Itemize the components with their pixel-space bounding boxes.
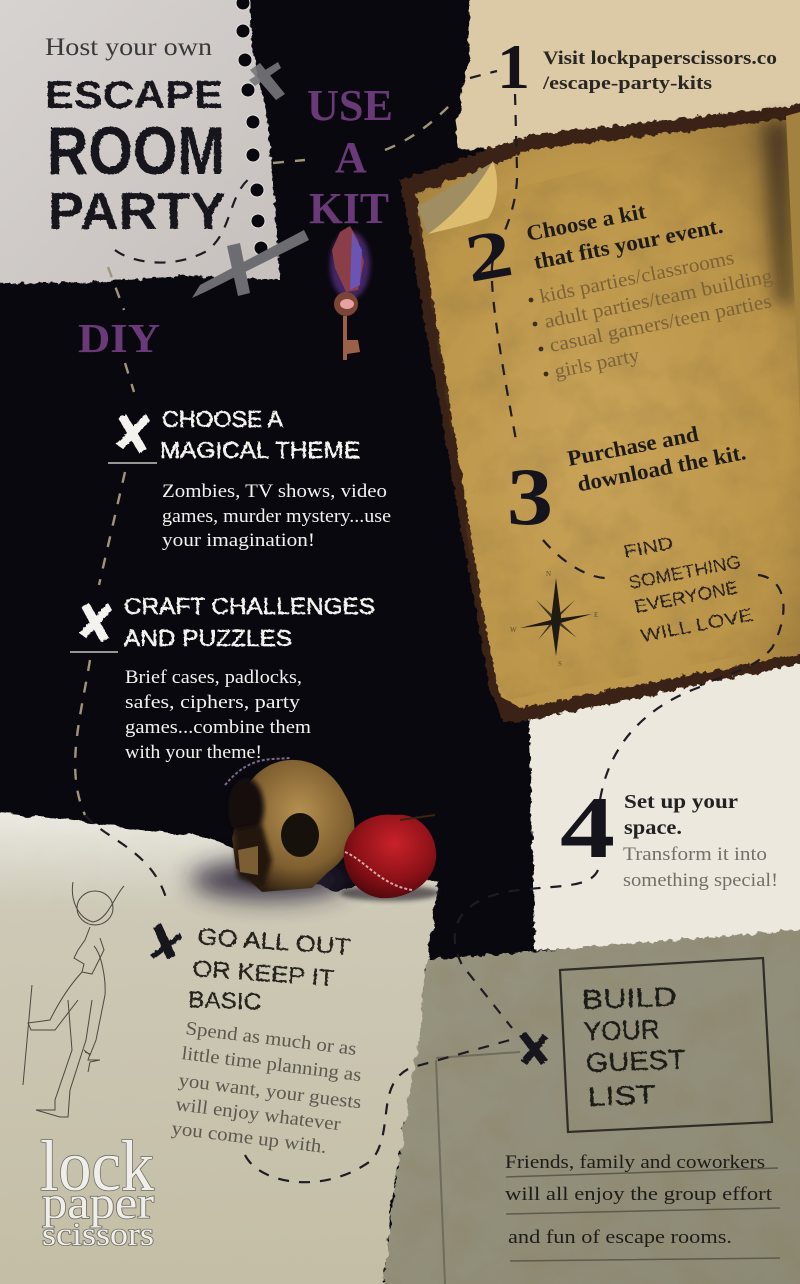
heading: DIY: DIY bbox=[78, 315, 160, 361]
callout: go all out: BASIC bbox=[188, 986, 262, 1015]
panel: envelope lower right bbox=[382, 930, 800, 1284]
title: PARTY bbox=[48, 183, 226, 241]
text: spend as much: little time planning as bbox=[180, 1043, 363, 1086]
text: Host your own: Host your own bbox=[45, 32, 212, 61]
panel: cream paper lower left bbox=[0, 812, 437, 1284]
step 1: /escape-party-kits bbox=[542, 73, 712, 94]
step 1: 1 bbox=[497, 31, 530, 102]
icon: compass rose: N bbox=[546, 570, 551, 578]
step: craft challenges and puzzles: safes, ciphers, party bbox=[125, 692, 301, 713]
panel: beige top-right paper bbox=[455, 0, 800, 150]
callout: find something everyone will love bbox=[622, 533, 755, 646]
heading: use a kit bbox=[307, 81, 393, 233]
callout: find something everyone will love: EVERYONE bbox=[633, 577, 740, 617]
panel: build your guest list box: BUILD bbox=[581, 982, 677, 1015]
panel: build your guest list box: YOUR bbox=[583, 1014, 660, 1047]
logo bbox=[40, 1126, 154, 1253]
icon: compass rose: W bbox=[510, 626, 517, 634]
icon: egyptian figure bbox=[23, 882, 124, 1117]
step 2: casual gamers/teen parties bbox=[548, 290, 774, 357]
text: spend as much: Spend as much or as bbox=[184, 1018, 358, 1060]
step 1: Visit lockpaperscissors.co bbox=[543, 48, 777, 69]
icon: black x bbox=[150, 923, 182, 959]
title: ROOM bbox=[47, 113, 225, 189]
callout: find something everyone will love: FIND bbox=[622, 533, 675, 562]
callout: find something everyone will love: SOMETHING bbox=[627, 552, 743, 593]
step: choose a magical theme: your imagination! bbox=[162, 530, 315, 551]
callout: go all out bbox=[188, 923, 351, 1015]
step: choose a magical theme: Zombies, TV shows, video bbox=[162, 481, 387, 502]
step 4: Transform it into bbox=[623, 844, 767, 865]
icon: folded page corner bbox=[417, 161, 497, 234]
panel: build your guest list box: LIST bbox=[587, 1080, 656, 1112]
callout: go all out: OR KEEP IT bbox=[192, 955, 335, 991]
text: spend as much: you come up with. bbox=[170, 1118, 328, 1158]
step 3 bbox=[507, 413, 748, 542]
icon: skull bbox=[190, 758, 354, 900]
heading: use a kit: KIT bbox=[309, 184, 389, 233]
step: choose a magical theme: games, murder mystery...use bbox=[162, 506, 391, 527]
step 2: adult parties/team building bbox=[543, 265, 774, 333]
step: craft challenges and puzzles: CRAFT CHALLENGES bbox=[124, 593, 375, 619]
callout: find something everyone will love: WILL LOVE bbox=[639, 605, 755, 646]
step: craft challenges and puzzles: games...combine them bbox=[125, 717, 311, 738]
step 1 bbox=[497, 31, 777, 102]
text: friends family: Friends, family and coworkers bbox=[505, 1152, 765, 1173]
step: choose a magical theme: CHOOSE A bbox=[162, 406, 284, 432]
text: friends family: and fun of escape rooms. bbox=[508, 1227, 732, 1248]
title bbox=[45, 74, 226, 241]
heading: use a kit: USE bbox=[307, 81, 393, 130]
icon: compass rose: S bbox=[558, 660, 562, 668]
panel: build your guest list box bbox=[560, 958, 772, 1132]
step: craft challenges and puzzles: AND PUZZLES bbox=[124, 625, 292, 651]
step 4: something special! bbox=[623, 870, 778, 891]
text: spend as much: you want, your guests bbox=[177, 1070, 363, 1113]
icon: tape bottom bbox=[192, 230, 309, 298]
step 2: 2 bbox=[459, 214, 518, 297]
callout: go all out: GO ALL OUT bbox=[197, 923, 351, 960]
heading: use a kit: A bbox=[335, 133, 367, 182]
icon: white x bbox=[116, 414, 150, 453]
step 2: kids parties/classrooms bbox=[538, 247, 736, 308]
logo: lock bbox=[40, 1126, 154, 1206]
panel: white torn paper for step 4 bbox=[528, 650, 800, 950]
step 3: download the kit. bbox=[575, 439, 748, 496]
text: friends family: will all enjoy the group effort bbox=[505, 1184, 773, 1205]
icon: tape top bbox=[249, 62, 285, 100]
icon: compass rose: E bbox=[594, 611, 598, 619]
icon: white x bbox=[79, 603, 112, 642]
text: spend as much bbox=[170, 1018, 363, 1158]
step: craft challenges and puzzles: with your theme! bbox=[125, 742, 262, 763]
panel: old book bbox=[400, 104, 800, 722]
icon: black x by guest list bbox=[519, 1032, 548, 1065]
step: craft challenges and puzzles bbox=[70, 593, 375, 763]
step 3: 3 bbox=[507, 451, 553, 542]
step 2: girls party bbox=[553, 344, 641, 383]
step: craft challenges and puzzles: Brief cases, padlocks, bbox=[125, 667, 302, 688]
step 2: that fits your event. bbox=[532, 213, 725, 274]
icon: key bbox=[330, 226, 370, 360]
step 4: Set up your bbox=[624, 791, 738, 813]
text: friends family bbox=[505, 1152, 780, 1261]
step: choose a magical theme bbox=[108, 406, 391, 551]
logo: scissors bbox=[42, 1217, 154, 1253]
step: choose a magical theme: MAGICAL THEME bbox=[160, 437, 360, 463]
text: spend as much: will enjoy whatever bbox=[174, 1094, 342, 1135]
step 3: Purchase and bbox=[565, 421, 701, 471]
step 2 bbox=[459, 184, 774, 383]
dashed path bbox=[75, 71, 783, 1182]
step 4: space. bbox=[624, 817, 682, 839]
icon: apple bbox=[340, 815, 440, 901]
logo: paper bbox=[42, 1177, 154, 1228]
panel: grey note paper bbox=[0, 0, 280, 284]
panel: build your guest list box: GUEST bbox=[585, 1045, 686, 1078]
title: ESCAPE bbox=[45, 74, 223, 117]
step 4: 4 bbox=[560, 780, 615, 877]
icon: compass rose bbox=[510, 570, 598, 668]
step 2: Choose a kit bbox=[524, 198, 648, 246]
step 4 bbox=[560, 780, 778, 891]
